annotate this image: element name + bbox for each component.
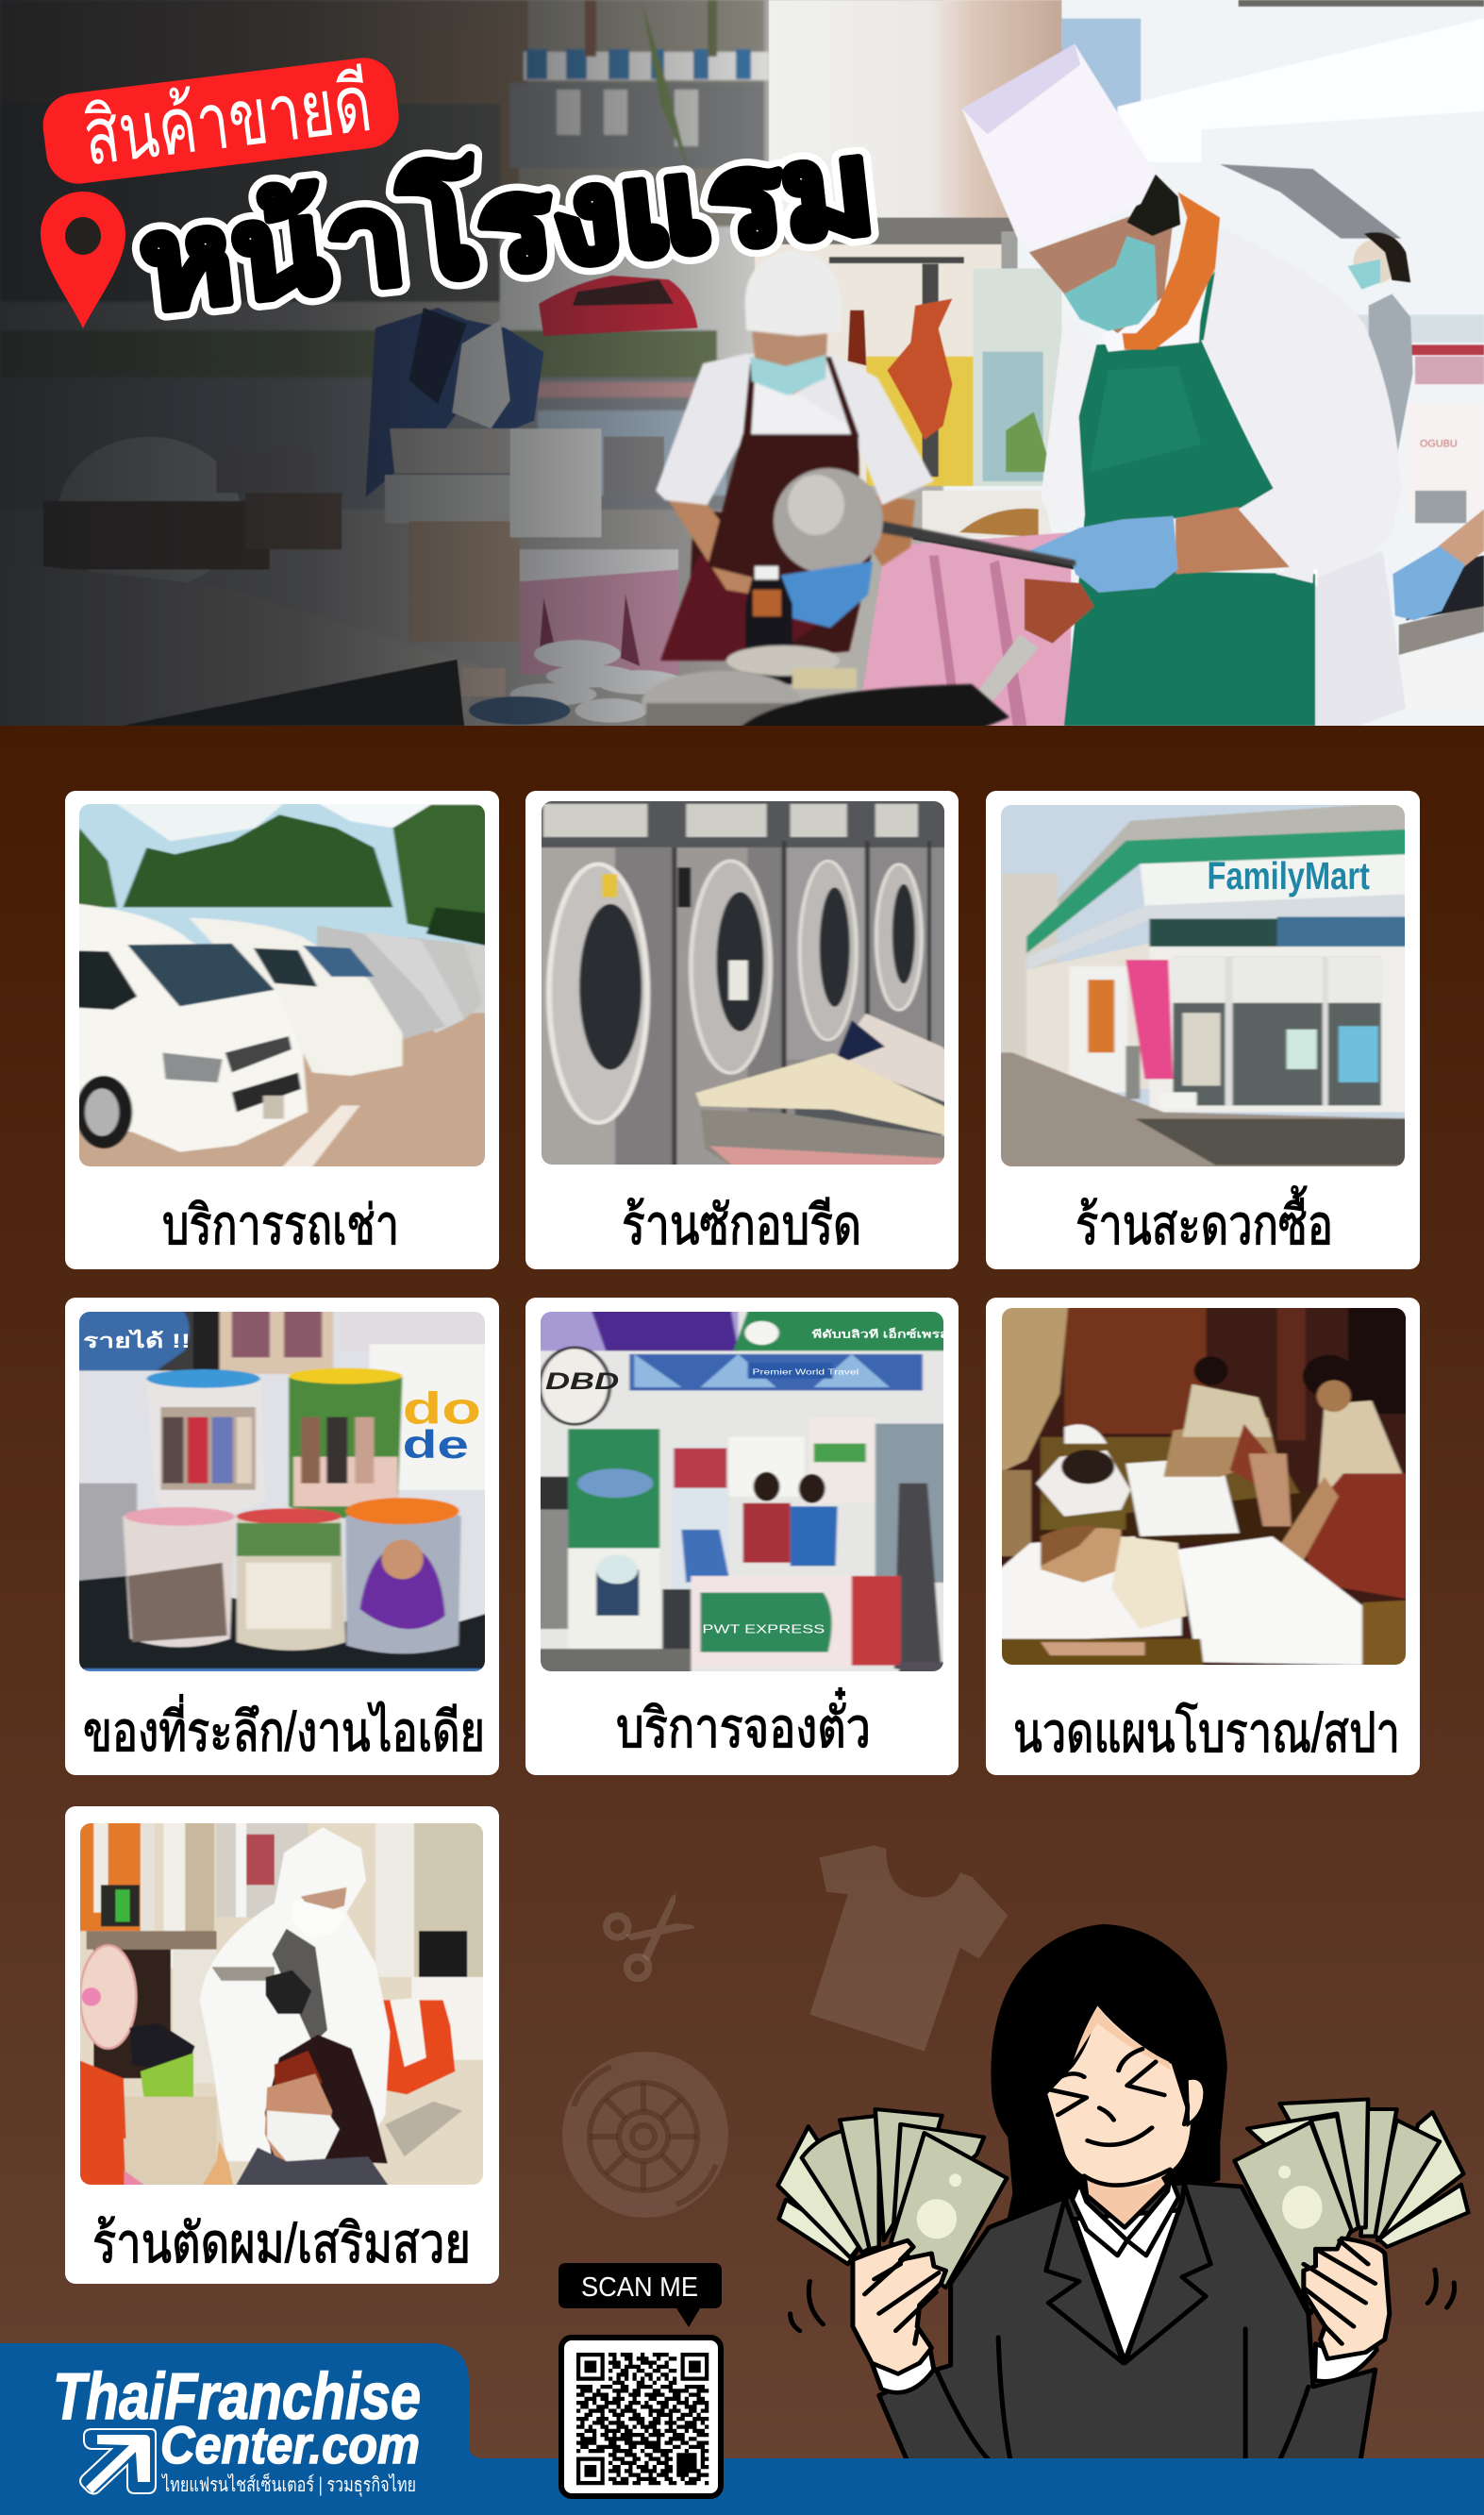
label: บริการจองตั๋ว [616, 1687, 871, 1759]
pots [390, 428, 510, 473]
face [1029, 199, 1176, 333]
icon: t-shirt watermark [809, 1846, 1008, 2052]
photo: printed mugs: do [403, 1383, 481, 1434]
green apron [1064, 341, 1315, 726]
photo: salon hairdresser in PPE [80, 1823, 483, 2185]
closed eyes and smile [1051, 2049, 1164, 2115]
ladle [882, 521, 1075, 566]
right cash fan [1234, 2100, 1468, 2314]
tongs handle [913, 530, 1075, 569]
photo: FamilyMart store [1001, 805, 1405, 1166]
bottle [745, 576, 792, 684]
logo: ThaiFranchise Center: Center.com [160, 2415, 420, 2474]
icon: location pin [41, 192, 125, 328]
neck [1084, 2171, 1168, 2227]
hero photo: chefs cooking in front of hotel [0, 0, 1484, 726]
chef hat [961, 44, 1156, 250]
hair [991, 1924, 1227, 2245]
collar [1073, 2183, 1127, 2255]
arm and sleeve [1176, 507, 1290, 574]
photo: travel booth [541, 1312, 943, 1671]
photo: printed mugs: de [403, 1423, 469, 1467]
arm [665, 495, 759, 595]
bowls [510, 640, 683, 723]
QR code [559, 2335, 724, 2499]
photo: washing machines [542, 801, 944, 1165]
red pill label [40, 54, 403, 188]
face [752, 330, 827, 394]
metal frame [755, 218, 1015, 244]
orange scarf [1122, 193, 1220, 349]
left cuff and hand [853, 2238, 1390, 2392]
mannequin clothes [366, 308, 543, 497]
coat collar V [1101, 306, 1201, 352]
shirt [1075, 2210, 1179, 2361]
scan me label [559, 2263, 722, 2327]
main chef left sleeve [1041, 315, 1096, 526]
icon: arrow [80, 2429, 156, 2493]
card: van rental [65, 791, 499, 1269]
card: ticket booking [525, 1298, 959, 1775]
hat [745, 250, 842, 336]
main chef coat [1201, 226, 1401, 583]
hero photo: chefs cooking in front of hotel: OGUBU [1420, 438, 1458, 449]
card: hair salon [65, 1806, 499, 2284]
woman chef in page pixels [642, 250, 1075, 736]
photo: FamilyMart store: FamilyMart [1208, 854, 1370, 897]
scan me label: SCAN ME [581, 2272, 698, 2303]
right counter [1401, 648, 1484, 708]
lapels [1046, 2197, 1124, 2363]
pale wall behind woman right side [689, 510, 877, 661]
face [1047, 2006, 1191, 2187]
label: ร้านสะดวกซื้อ [1075, 1186, 1333, 1256]
card: souvenirs [65, 1298, 499, 1775]
red pill label: สินค้าขายดี [78, 59, 376, 181]
illustration: businesswoman holding cash fans [775, 1923, 1471, 2458]
photo: rental vans [79, 804, 485, 1166]
lower hand and wok handle [1025, 578, 1094, 644]
motion marks [791, 2270, 1455, 2331]
background right [1061, 19, 1141, 139]
logo: ThaiFranchise Center [53, 2359, 421, 2497]
headline: หน้าโรงแรม [133, 111, 880, 337]
headline: หน้าโรงแรม [133, 111, 880, 337]
glove [1029, 516, 1178, 593]
shirt [656, 354, 934, 505]
label: ร้านซักอบรีด [622, 1195, 861, 1256]
ear [1187, 2078, 1205, 2124]
icon: scissors watermark [603, 1894, 695, 1982]
right cuff and hand [1314, 2339, 1376, 2381]
photo: travel booth: DBD [545, 1367, 619, 1395]
card: convenience store [986, 791, 1420, 1269]
photo: travel booth: Premier World Travel [753, 1368, 859, 1377]
column [769, 0, 1061, 218]
counter [0, 562, 481, 726]
table [922, 491, 1053, 537]
icon: wheel watermark [562, 2052, 728, 2218]
photo: travel booth: PWT EXPRESS [702, 1623, 825, 1636]
gloves [778, 562, 873, 628]
dark vignette left [0, 0, 1484, 726]
photo: massage room [1002, 1308, 1406, 1665]
left cash fan [778, 2109, 1007, 2288]
photo: printed mugs: รายได้ !! [83, 1329, 191, 1352]
roast ducks [888, 298, 953, 440]
pot and wok [642, 671, 802, 735]
jacket [879, 2183, 1376, 2473]
chafing dome [58, 437, 241, 590]
title group: best sellers in front of the hotel [40, 58, 880, 337]
person far right [1369, 293, 1413, 470]
car [539, 276, 698, 336]
photo: printed mugs [79, 1312, 485, 1671]
card: traditional massage and spa [986, 1298, 1420, 1775]
apron [708, 434, 860, 585]
label: บริการรถเช่า [162, 1195, 399, 1256]
card: laundry [525, 791, 959, 1269]
